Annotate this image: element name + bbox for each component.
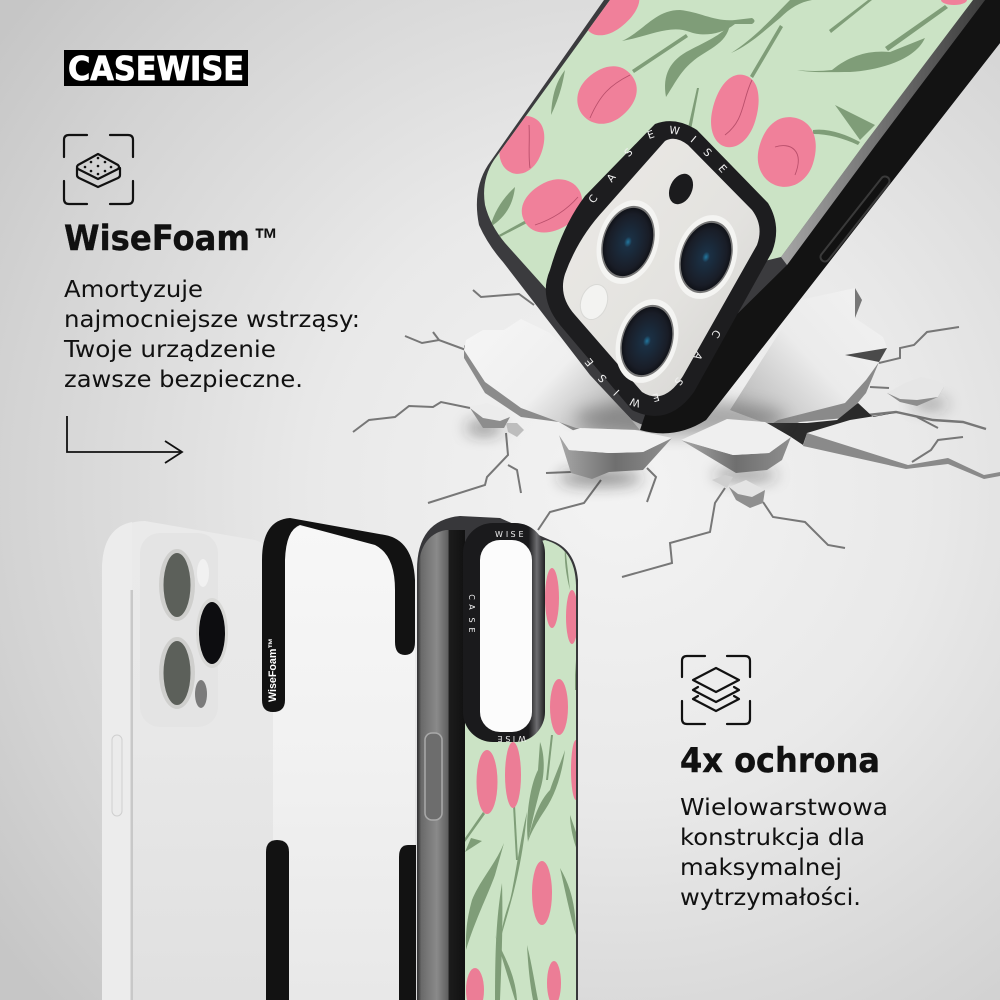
WiseFoam label: WiseFoam™ bbox=[267, 638, 279, 702]
arrow bbox=[67, 416, 182, 463]
heading: WiseFoam: ™ bbox=[254, 223, 278, 256]
side band bbox=[418, 530, 465, 1000]
text block: protection description bbox=[680, 795, 888, 911]
ring lettering: S bbox=[510, 530, 516, 539]
ring lettering: C bbox=[467, 594, 476, 600]
ring lettering: E bbox=[651, 390, 661, 404]
camera plateau bbox=[563, 139, 760, 396]
crack wedge right bbox=[803, 433, 1000, 479]
ring lettering: S bbox=[622, 146, 636, 159]
camera ring bbox=[463, 523, 545, 742]
volume button bbox=[112, 735, 122, 816]
ring lettering: E bbox=[646, 128, 656, 142]
chunk A bbox=[559, 428, 672, 479]
phone ground shadow bbox=[575, 400, 785, 436]
ring lettering: S bbox=[467, 617, 476, 623]
logo: CASEWISE bbox=[68, 49, 244, 88]
illustration: white phone bbox=[102, 521, 274, 1000]
lenses bbox=[159, 549, 228, 709]
black bottom foam left bbox=[266, 840, 289, 1000]
ring lettering bbox=[467, 530, 526, 743]
lens top left bbox=[586, 192, 670, 292]
grey inner strip bbox=[781, 0, 985, 265]
slab right bbox=[730, 288, 900, 445]
ring lettering: C bbox=[709, 327, 723, 340]
phone side band bbox=[102, 522, 132, 1000]
ring lettering: A bbox=[605, 171, 619, 185]
tulip pattern bbox=[484, 0, 973, 289]
ground shadows bbox=[466, 400, 948, 485]
camera island ring bbox=[546, 121, 776, 416]
text block: WiseFoam description: zawsze bezpieczne. bbox=[64, 367, 303, 393]
transparent panel bbox=[273, 526, 415, 1000]
tulips bbox=[466, 568, 581, 1000]
illustration: foam layer bbox=[262, 518, 416, 1000]
text block: WiseFoam description: Twoje urządzenie bbox=[63, 337, 276, 363]
ring lettering: I bbox=[513, 734, 515, 743]
lens right bbox=[664, 207, 748, 307]
side button bbox=[425, 733, 442, 820]
leaves bbox=[465, 545, 577, 1000]
camera plateau bbox=[140, 533, 218, 727]
text block: WiseFoam description: Amortyzuje bbox=[64, 277, 203, 303]
ring lettering: S bbox=[671, 375, 685, 388]
ring lettering: I bbox=[506, 530, 508, 539]
petal lines bbox=[529, 75, 798, 225]
side button bbox=[825, 181, 885, 257]
black side band bbox=[640, 0, 1000, 433]
ring lettering bbox=[583, 124, 729, 409]
ring lettering: W bbox=[495, 530, 503, 539]
tulips bbox=[492, 0, 967, 243]
text block: protection description: wytrzymałości. bbox=[680, 885, 861, 911]
black top foam bbox=[262, 518, 415, 712]
text block: protection description: Wielowarstwowa bbox=[680, 795, 888, 821]
ring opening bbox=[480, 540, 532, 732]
ring lettering: S bbox=[701, 146, 714, 160]
ring lettering: C bbox=[587, 193, 601, 206]
ring lettering: W bbox=[518, 734, 526, 743]
phone body bbox=[102, 521, 274, 1000]
ring lettering: S bbox=[596, 371, 609, 385]
text block: WiseFoam description bbox=[63, 277, 360, 393]
back panel and pattern bbox=[465, 530, 581, 1000]
heading: WiseFoam: WiseFoam bbox=[64, 219, 250, 259]
ring lettering: E bbox=[497, 734, 503, 743]
crack lines bbox=[353, 290, 986, 577]
illustration: falling phone with tulip case bbox=[470, 0, 1000, 433]
text block: protection description: konstrukcja dla bbox=[680, 825, 865, 851]
ring lettering: W bbox=[668, 124, 681, 138]
heading: 4x ochrona: 4x ochrona bbox=[680, 741, 880, 781]
ring lettering: S bbox=[505, 734, 511, 743]
icon: layers bbox=[682, 656, 750, 724]
ring lettering: I bbox=[688, 134, 698, 145]
ring lettering: A bbox=[690, 349, 705, 363]
ring lettering: W bbox=[628, 395, 642, 409]
rock C bbox=[887, 377, 944, 406]
rocks F and G bbox=[712, 475, 765, 508]
sensor bbox=[576, 281, 612, 323]
ring lettering: E bbox=[467, 627, 476, 633]
black bottom foam right bbox=[399, 845, 416, 1000]
case bumper bbox=[477, 0, 1000, 430]
lens bottom bbox=[605, 291, 689, 391]
rock D bbox=[470, 403, 524, 437]
icon: foam bbox=[64, 135, 133, 204]
text block: WiseFoam description: najmocniejsze wstrząsy: bbox=[64, 307, 360, 333]
case frame bbox=[417, 516, 578, 1000]
flash bbox=[664, 170, 698, 208]
chunk B bbox=[681, 419, 791, 473]
ring lettering: E bbox=[583, 356, 596, 368]
stems and leaves bbox=[490, 0, 948, 238]
illustration: cracked ground bbox=[353, 288, 1000, 577]
illustration: tulip case side view bbox=[417, 516, 581, 1000]
ring lettering: I bbox=[612, 387, 622, 397]
slab left bbox=[464, 319, 640, 432]
text block: protection description: maksymalnej bbox=[680, 855, 842, 881]
ring lettering: E bbox=[518, 530, 524, 539]
ring lettering: E bbox=[716, 163, 729, 175]
ring lettering: A bbox=[467, 604, 476, 610]
